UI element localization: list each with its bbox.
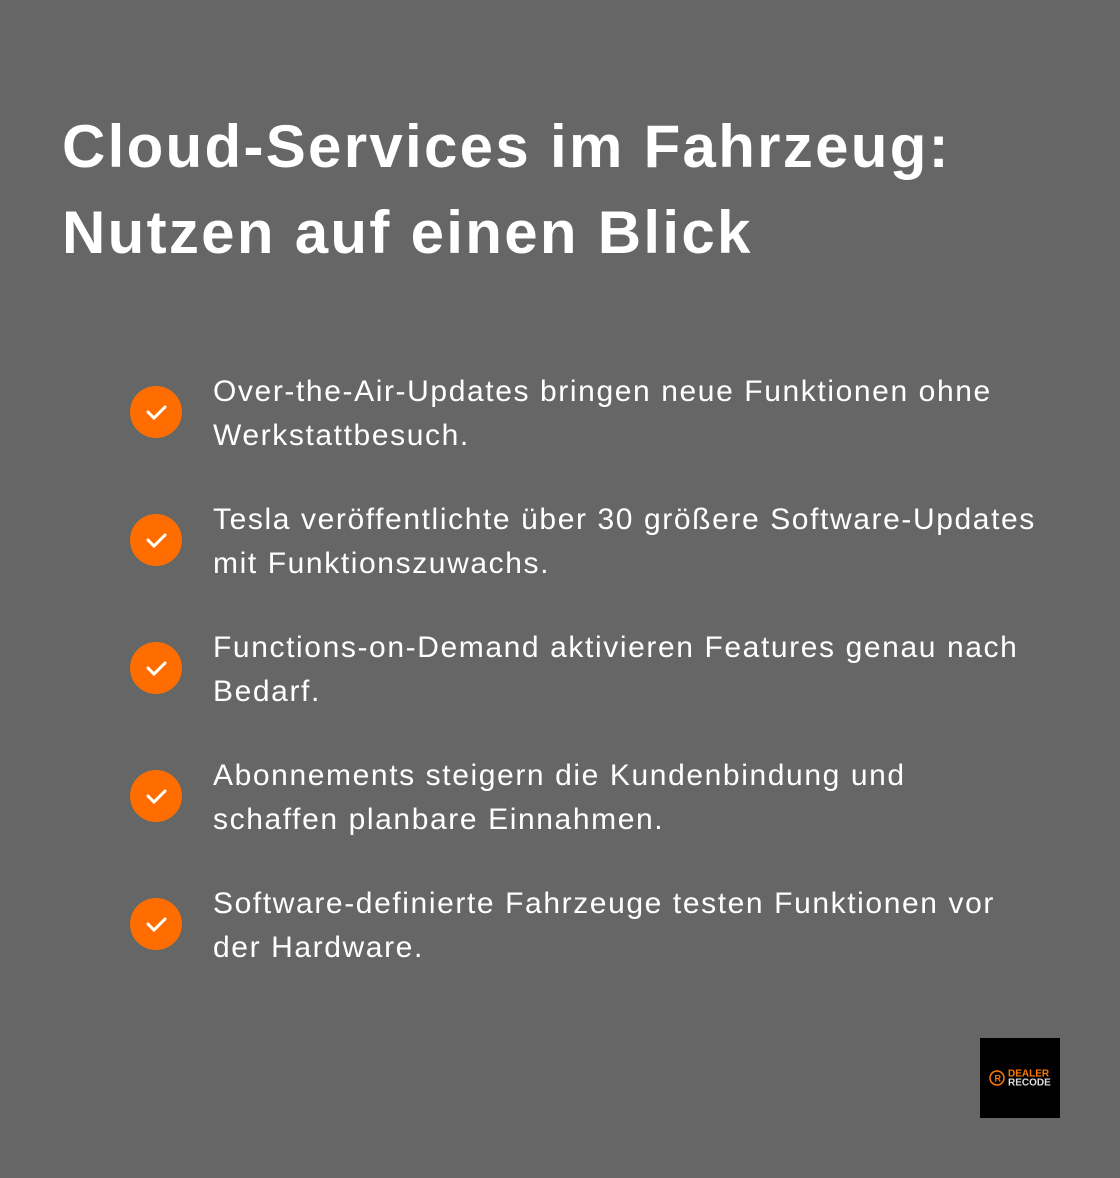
icon: check: [130, 770, 182, 822]
logo: DEALER: [1008, 1068, 1050, 1080]
item 2: [130, 503, 1036, 580]
text 4: schaffen planbare Einnahmen.: [213, 803, 664, 836]
text 2: [213, 503, 1036, 580]
item 1: [130, 375, 992, 452]
text 4: [213, 759, 906, 836]
text 3: Bedarf.: [213, 675, 321, 708]
text 4: Abonnements steigern die Kundenbindung und: [213, 759, 906, 792]
logo: [980, 1038, 1060, 1118]
title: Nutzen auf einen Blick: [62, 199, 753, 266]
item 3: [130, 631, 1018, 708]
text 3: Functions-on-Demand aktivieren Features genau nach: [213, 631, 1018, 664]
text 1: [213, 375, 992, 452]
text 5: [213, 887, 995, 964]
title: [62, 113, 951, 266]
text 5: Software-definierte Fahrzeuge testen Funktionen vor: [213, 887, 995, 920]
text 5: der Hardware.: [213, 931, 424, 964]
text 2: Tesla veröffentlichte über 30 größere Software-Updates: [213, 503, 1036, 536]
text 3: [213, 631, 1018, 708]
text 1: Over-the-Air-Updates bringen neue Funktionen ohne: [213, 375, 992, 408]
item 4: [130, 759, 906, 836]
icon: check: [130, 514, 182, 566]
icon: check: [130, 642, 182, 694]
icon: check: [130, 386, 182, 438]
logo: R: [994, 1074, 1002, 1084]
item 5: [130, 887, 995, 964]
text 1: Werkstattbesuch.: [213, 419, 470, 452]
icon: check: [130, 898, 182, 950]
logo: RECODE: [1008, 1078, 1051, 1088]
text 2: mit Funktionszuwachs.: [213, 547, 550, 580]
title: Cloud-Services im Fahrzeug:: [62, 113, 951, 180]
